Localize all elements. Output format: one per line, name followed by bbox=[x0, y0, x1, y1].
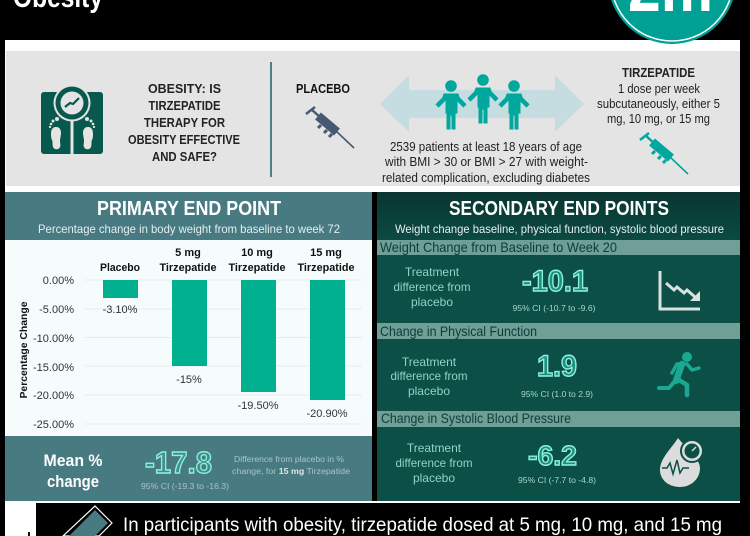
section: physical function: 95% CI (1.0 to 2.9) bbox=[521, 389, 593, 399]
section: systolic blood pressure: 95% CI (-7.7 to -4.8) bbox=[518, 475, 596, 485]
section: weight change: -10.1 bbox=[522, 265, 588, 298]
section: systolic blood pressure bbox=[377, 410, 740, 487]
white footer strip bbox=[5, 501, 740, 503]
icon: three people bbox=[437, 74, 528, 129]
primary heading bbox=[38, 198, 340, 236]
stat description: change, for 15 mg Tirzepatide bbox=[232, 467, 351, 476]
secondary heading: Weight change baseline, physical function, systolic blood pressure bbox=[395, 222, 724, 236]
bar value labels bbox=[103, 304, 348, 420]
bar value labels: -3.10% bbox=[103, 304, 138, 316]
y axis labels: -5.00% bbox=[39, 304, 74, 316]
panel: study overview bbox=[6, 51, 740, 186]
population text: with BMI > 30 or BMI > 27 with weight- bbox=[384, 155, 588, 169]
stat: -17.8: -17.8 bbox=[145, 445, 212, 480]
section: systolic blood pressure: -6.2 bbox=[528, 440, 577, 471]
icon: weighing scale bbox=[41, 84, 103, 155]
secondary heading bbox=[395, 198, 724, 236]
y axis labels: -20.00% bbox=[33, 390, 74, 402]
tirzepatide dosing text: subcutaneously, either 5 bbox=[597, 97, 720, 111]
question heading: OBESITY EFFECTIVE bbox=[128, 132, 240, 147]
stat: -17.8: 95% CI (-19.3 to -16.3) bbox=[141, 481, 229, 491]
placebo label: PLACEBO bbox=[296, 81, 350, 96]
column headings: Placebo bbox=[100, 262, 140, 274]
section: physical function: Treatment bbox=[402, 355, 457, 369]
arrow: double-headed population arrow bbox=[380, 75, 584, 132]
column headings: 5 mg bbox=[175, 247, 201, 259]
icon: tirzepatide syringe bbox=[640, 133, 688, 174]
bar chart bbox=[5, 240, 372, 436]
section: weight change: Weight Change from Baseline to Week 20 bbox=[380, 239, 617, 255]
conclusion bar bbox=[28, 503, 750, 536]
population text bbox=[382, 140, 590, 185]
section: systolic blood pressure: Treatment bbox=[407, 441, 462, 455]
tirzepatide dosing text: mg, 10 mg, or 15 mg bbox=[607, 112, 710, 126]
population text: 2539 patients at least 18 years of age bbox=[390, 140, 582, 154]
tirzepatide dosing text: TIRZEPATIDE bbox=[622, 65, 695, 80]
question heading: AND SAFE? bbox=[152, 149, 217, 164]
y axis labels bbox=[33, 275, 74, 431]
section: weight change: 95% CI (-10.7 to -9.6) bbox=[512, 303, 596, 313]
column headings: Tirzepatide bbox=[298, 262, 354, 274]
y axis title: Percentage Change bbox=[18, 301, 30, 398]
section: weight change: placebo bbox=[411, 295, 453, 309]
column headings bbox=[100, 247, 354, 274]
section: weight change bbox=[377, 239, 740, 313]
section: physical function bbox=[377, 323, 740, 399]
bars bbox=[103, 280, 345, 400]
section: systolic blood pressure: Change in Systolic Blood Pressure bbox=[381, 410, 571, 426]
icon: placebo syringe bbox=[306, 107, 354, 148]
column headings: 10 mg bbox=[241, 247, 273, 259]
icon: runner bbox=[659, 352, 699, 395]
section: weight change: Treatment bbox=[405, 265, 460, 279]
primary heading: Percentage change in body weight from baseline to week 72 bbox=[38, 222, 340, 236]
y axis labels: -15.00% bbox=[33, 362, 74, 374]
bar value labels: -20.90% bbox=[307, 408, 348, 420]
bar value labels: -15% bbox=[176, 374, 202, 386]
section: systolic blood pressure: placebo bbox=[413, 471, 455, 485]
bar value labels: -19.50% bbox=[238, 400, 279, 412]
stat description: Difference from placebo in % bbox=[234, 455, 344, 464]
logo bbox=[608, 0, 736, 44]
icon: declining chart bbox=[660, 271, 700, 309]
section: physical function: difference from bbox=[390, 369, 468, 383]
column headings: Tirzepatide bbox=[228, 262, 286, 274]
y axis labels: -25.00% bbox=[33, 419, 74, 431]
column headings: Tirzepatide bbox=[160, 262, 216, 274]
mean change label: Mean % bbox=[44, 451, 102, 470]
question heading: OBESITY: IS bbox=[148, 81, 221, 96]
section: physical function: 1.9 bbox=[537, 350, 577, 383]
y axis labels: 0.00% bbox=[43, 275, 74, 287]
panel: primary end point bbox=[5, 192, 372, 501]
tirzepatide dosing text: 1 dose per week bbox=[618, 82, 701, 96]
section: physical function: Change in Physical Function bbox=[380, 323, 537, 339]
question heading bbox=[128, 81, 240, 164]
y axis labels: -10.00% bbox=[33, 333, 74, 345]
stat: -17.8 bbox=[141, 445, 229, 491]
column headings: 15 mg bbox=[310, 247, 342, 259]
tirzepatide dosing text bbox=[597, 65, 720, 126]
secondary heading: SECONDARY END POINTS bbox=[449, 198, 669, 220]
question heading: TIRZEPATIDE bbox=[148, 98, 221, 113]
section: physical function: placebo bbox=[408, 384, 450, 398]
question heading: THERAPY FOR bbox=[144, 115, 226, 130]
primary heading: PRIMARY END POINT bbox=[97, 198, 281, 220]
section: systolic blood pressure: difference from bbox=[396, 456, 472, 470]
white page background bbox=[5, 40, 740, 192]
conclusion text: In participants with obesity, tirzepatide dosed at 5 mg, 10 mg, and 15 mg bbox=[123, 514, 722, 536]
stat description bbox=[232, 455, 351, 476]
population text: related complication, excluding diabetes bbox=[382, 171, 590, 185]
mean change label bbox=[44, 451, 102, 491]
panel: secondary end points bbox=[377, 192, 740, 501]
mean change label: change bbox=[47, 472, 99, 491]
section: weight change: difference from bbox=[394, 280, 470, 294]
icon: pencil bbox=[63, 506, 112, 536]
icon: blood pressure drop bbox=[660, 438, 703, 487]
